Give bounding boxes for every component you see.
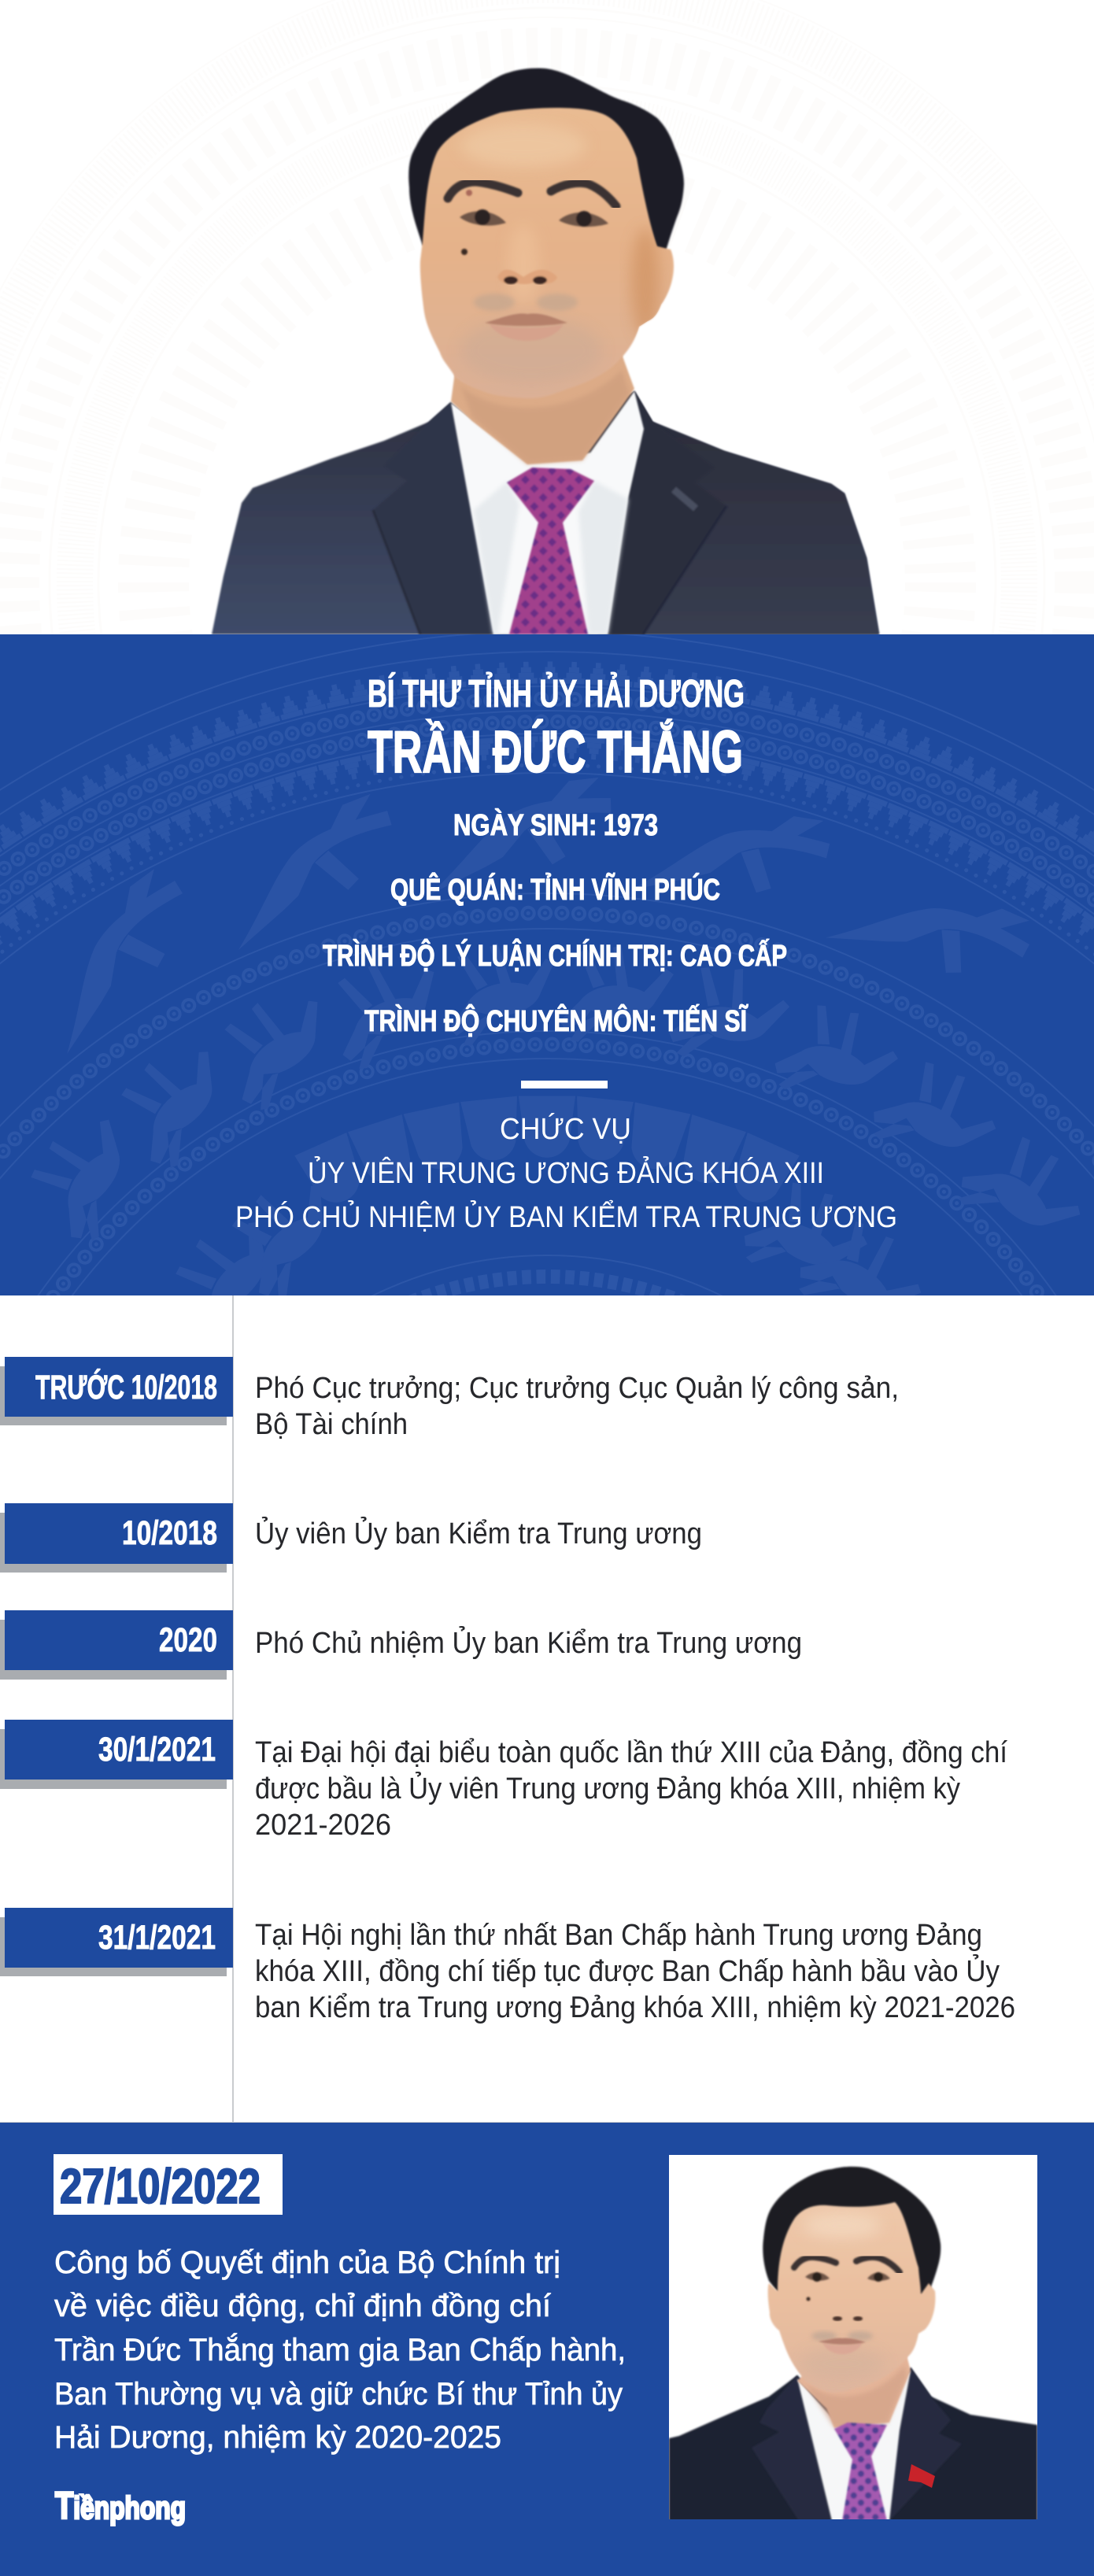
suit jacket	[669, 2367, 1037, 2521]
necktie	[834, 2423, 887, 2521]
mouth	[819, 2338, 866, 2354]
background: faint drum pattern on white header	[0, 0, 1094, 1203]
timeline entry: 30/1/2021: 2021-2026	[255, 1809, 391, 1842]
panel: biography header	[0, 634, 1094, 1295]
timeline entry: 31/1/2021: 31/1/2021	[98, 1919, 216, 1957]
white shirt	[451, 391, 644, 634]
text: appointment description	[54, 2245, 626, 2455]
divider bar	[521, 1081, 608, 1088]
title: position: BÍ THƯ TỈNH ỦY HẢI DƯƠNG	[368, 672, 745, 715]
timeline entry: 31/1/2021: khóa XIII, đồng chí tiếp tục được Ban Chấp hành bầu vào Ủy	[255, 1953, 1000, 1988]
eyes	[460, 190, 608, 255]
face	[768, 2202, 935, 2393]
face	[420, 108, 674, 398]
timeline entry: before 10/2018: Bộ Tài chính	[255, 1408, 408, 1441]
drum figures: birds, deer, people	[31, 778, 1080, 1295]
face shading	[807, 2207, 878, 2372]
heading: positions: CHỨC VỤ	[500, 1112, 631, 1146]
face shading	[460, 124, 660, 383]
background: bronze drum pattern	[0, 634, 1094, 1295]
necktie	[507, 468, 594, 634]
timeline entry: 30/1/2021: được bầu là Ủy viên Trung ương Đảng khóa XIII, nhiệm kỳ	[255, 1771, 960, 1805]
nose	[497, 270, 557, 284]
text: political theory level: TRÌNH ĐỘ LÝ LUẬN CHÍNH TRỊ: CAO CẤP	[323, 937, 787, 973]
timeline entry: 31/1/2021: Tại Hội nghị lần thứ nhất Ban Chấp hành Trung ương Đảng	[255, 1919, 982, 1952]
text: position line 2: PHÓ CHỦ NHIỆM ỦY BAN KIỂM TRA TRUNG ƯƠNG	[235, 1199, 897, 1234]
neck	[451, 354, 634, 464]
text: hometown: QUÊ QUÁN: TỈNH VĨNH PHÚC	[390, 872, 720, 907]
timeline entry: before 10/2018: Phó Cục trưởng; Cục trưởng Cục Quản lý công sản,	[255, 1372, 899, 1405]
text: appointment description: Ban Thường vụ và giữ chức Bí thư Tỉnh ủy	[54, 2377, 623, 2412]
timeline entry: 10/2018	[0, 1503, 702, 1573]
neck	[797, 2349, 911, 2428]
text: position line 1: ỦY VIÊN TRUNG ƯƠNG ĐẢNG KHÓA XIII	[308, 1155, 824, 1190]
text: professional level: TRÌNH ĐỘ CHUYÊN MÔN: TIẾN SĨ	[364, 1003, 748, 1038]
white shirt	[797, 2371, 911, 2521]
timeline entry: 31/1/2021: ban Kiểm tra Trung ương Đảng khóa XIII, nhiệm kỳ 2021-2026	[255, 1991, 1015, 2024]
date badge: 27/10/2022	[60, 2160, 261, 2214]
timeline entry: 2020: Phó Chủ nhiệm Ủy ban Kiểm tra Trung ương	[255, 1625, 802, 1660]
portrait: official photo	[669, 2155, 1037, 2521]
timeline entry: 2020	[0, 1610, 802, 1680]
title: name: TRẦN ĐỨC THẮNG	[368, 719, 743, 785]
text: appointment description: Hải Dương, nhiệm kỳ 2020-2025	[54, 2420, 501, 2455]
timeline entry: 30/1/2021	[0, 1720, 1007, 1842]
text: appointment description: Trần Đức Thắng tham gia Ban Chấp hành,	[54, 2332, 626, 2367]
hair	[408, 68, 684, 253]
suit jacket	[212, 391, 879, 634]
eyes	[805, 2272, 890, 2301]
party flag pin	[908, 2464, 935, 2488]
timeline entry: 10/2018: 10/2018	[122, 1514, 217, 1552]
nose	[833, 2316, 863, 2321]
eyebrows	[794, 2257, 900, 2272]
timeline entry: before 10/2018	[0, 1357, 899, 1441]
timeline axis line	[232, 1295, 234, 2123]
hair	[763, 2167, 941, 2297]
timeline entry: 2020: 2020	[159, 1621, 217, 1659]
timeline entry: 31/1/2021	[0, 1908, 1015, 2024]
text: date of birth: NGÀY SINH: 1973	[453, 808, 658, 842]
text: appointment description: Công bố Quyết định của Bộ Chính trị	[54, 2245, 560, 2280]
eyebrows	[448, 182, 616, 206]
mouth	[485, 313, 567, 341]
timeline entry: before 10/2018: TRƯỚC 10/2018	[35, 1368, 217, 1406]
timeline entry: 10/2018: Ủy viên Ủy ban Kiểm tra Trung ương	[255, 1516, 702, 1550]
text: appointment description: về việc điều động, chỉ định đồng chí	[54, 2289, 551, 2323]
portrait: main photo of Trần Đức Thắng	[212, 68, 879, 634]
panel: appointment footer	[0, 2122, 1094, 2576]
timeline entry: 30/1/2021: 30/1/2021	[98, 1731, 216, 1768]
timeline entry: 30/1/2021: Tại Đại hội đại biểu toàn quốc lần thứ XIII của Đảng, đồng chí	[255, 1736, 1007, 1769]
logo: Tiền Phong: Tiềnphong	[55, 2485, 186, 2527]
jacket lapels	[373, 391, 726, 634]
